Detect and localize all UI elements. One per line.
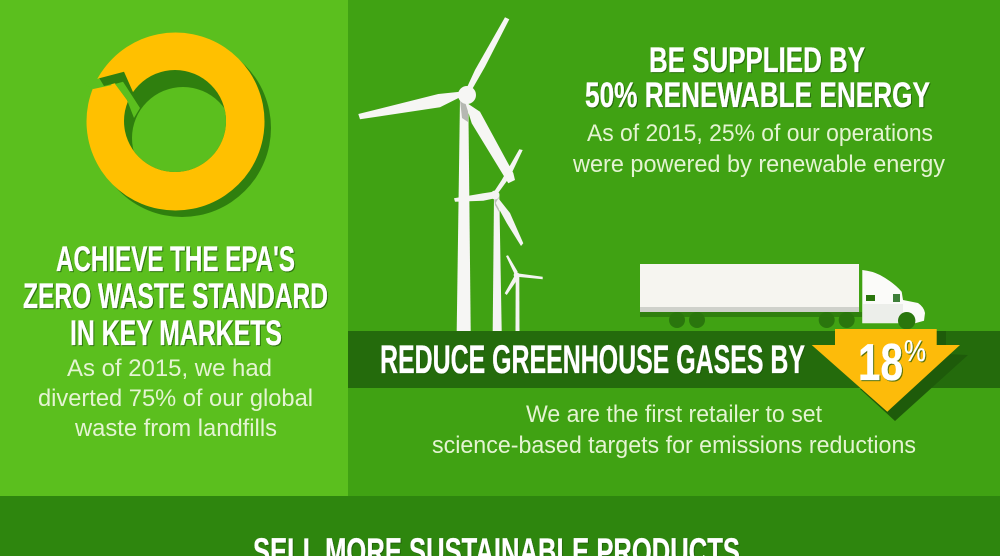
- icon: large wind turbine: [358, 17, 515, 331]
- icon: recycling ring: [84, 32, 271, 217]
- panel: zero waste: [0, 0, 348, 496]
- icon: medium wind turbine: [454, 149, 523, 331]
- panel: energy and emissions: [348, 0, 1000, 496]
- text: greenhouse gases detail: [432, 401, 916, 459]
- text: renewable energy detail: were powered by renewable energy: [572, 151, 945, 178]
- heading: zero waste: IN KEY MARKETS: [70, 314, 282, 353]
- band: greenhouse gases: [348, 331, 1000, 388]
- text: greenhouse gases detail: We are the first retailer to set: [526, 401, 822, 428]
- text: zero waste detail: As of 2015, we had: [67, 355, 272, 382]
- text: zero waste detail: waste from landfills: [74, 415, 277, 442]
- heading: zero waste: [23, 240, 328, 353]
- text: renewable energy detail: [572, 120, 945, 178]
- icon: truck: [640, 264, 925, 329]
- number: 18 percent: 18: [858, 334, 903, 392]
- text: zero waste detail: [38, 355, 313, 442]
- heading: zero waste: ACHIEVE THE EPA'S: [56, 240, 295, 279]
- icon: down arrow: [812, 329, 968, 421]
- icon: small wind turbine: [505, 255, 543, 331]
- heading: renewable energy: [585, 41, 930, 115]
- text: renewable energy detail: As of 2015, 25% of our operations: [587, 120, 933, 147]
- heading: zero waste: ZERO WASTE STANDARD: [23, 277, 328, 316]
- text: greenhouse gases detail: science-based targets for emissions reductions: [432, 432, 916, 459]
- heading: renewable energy: BE SUPPLIED BY: [649, 41, 865, 80]
- number: 18 percent: %: [904, 335, 926, 368]
- text: zero waste detail: diverted 75% of our global: [38, 385, 313, 412]
- panel: sustainable products: [0, 496, 1000, 556]
